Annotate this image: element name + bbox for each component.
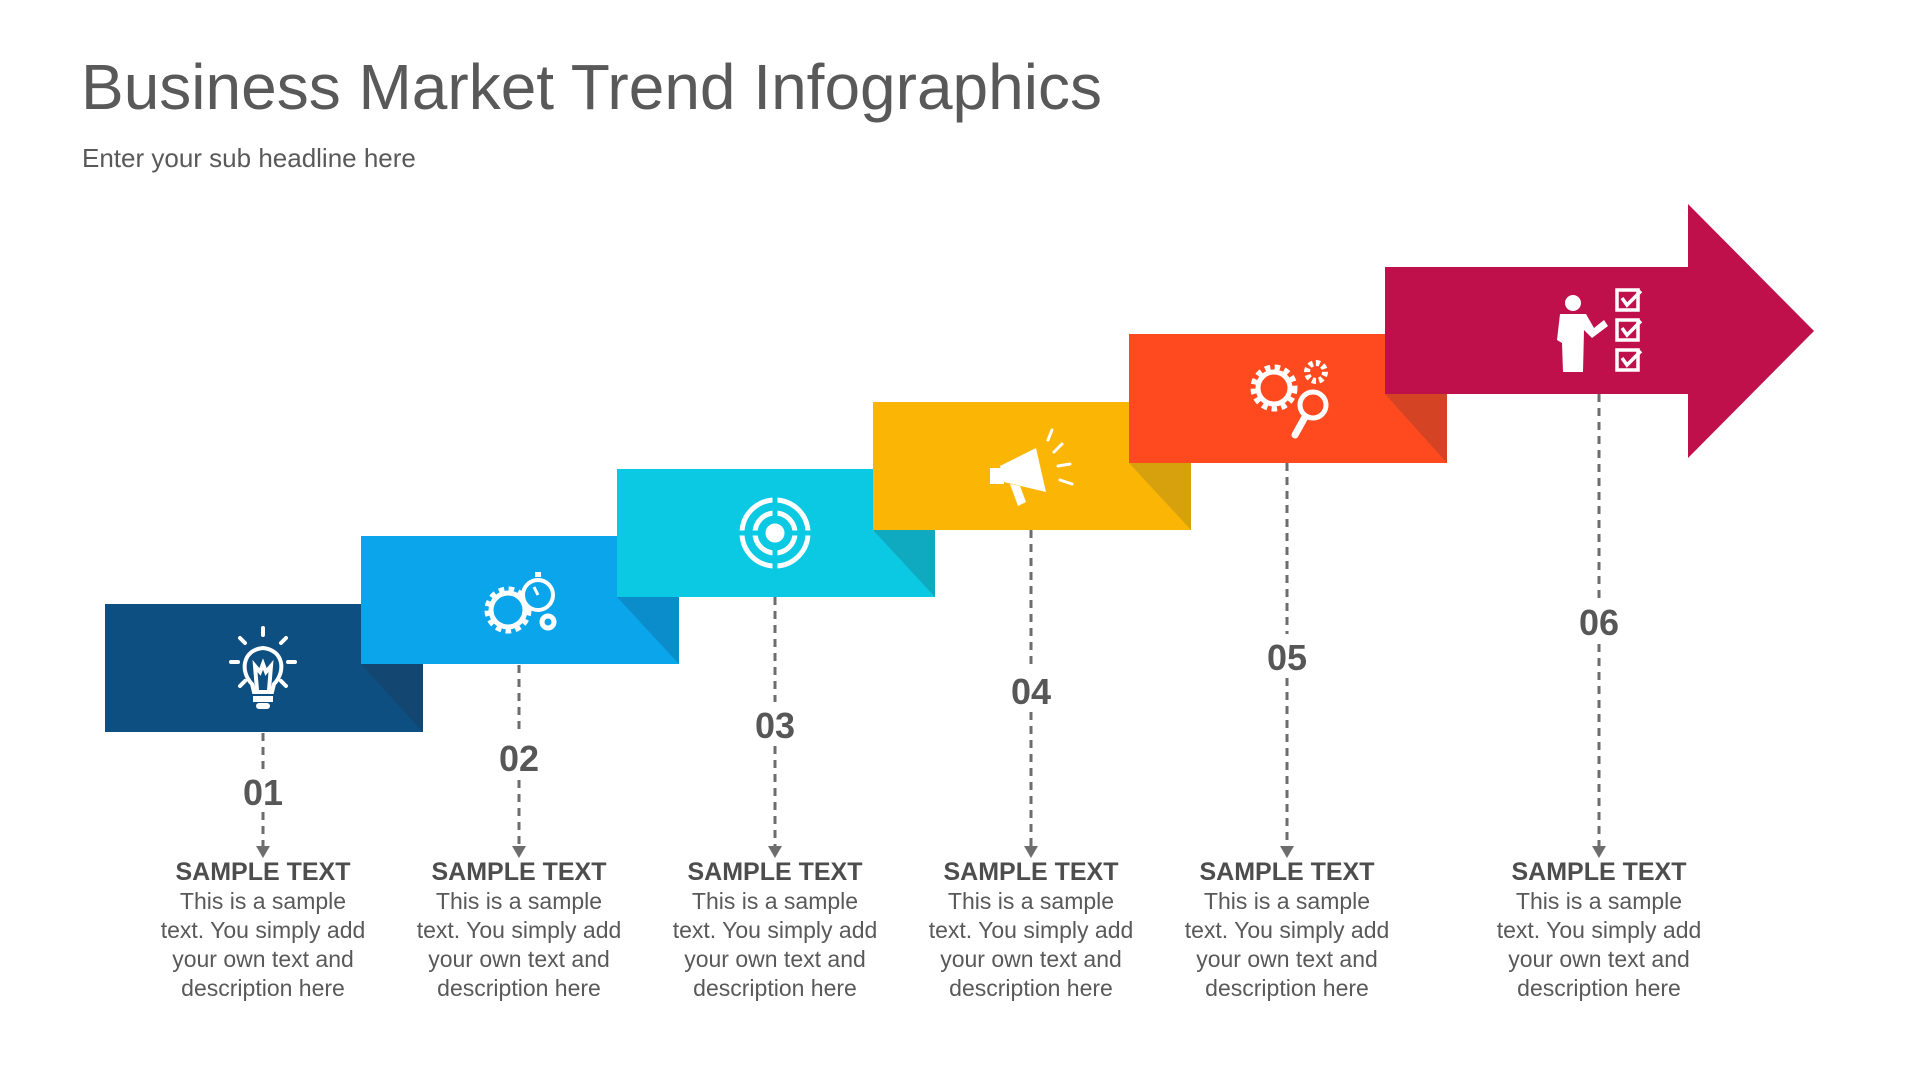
step 2 box xyxy=(361,536,679,664)
text: 04 xyxy=(1011,671,1051,712)
caption 2: SAMPLE TEXT xyxy=(431,858,606,886)
icon: presenter with checklist xyxy=(1557,290,1641,372)
caption 4: This is a sample xyxy=(948,888,1114,914)
caption 3: text. You simply add xyxy=(673,917,877,943)
text: 01 xyxy=(243,772,283,813)
icon: megaphone xyxy=(990,430,1072,506)
dashed connectors xyxy=(256,394,1606,858)
text: 06 xyxy=(1579,602,1619,643)
caption 5: SAMPLE TEXT xyxy=(1199,858,1374,886)
numbers xyxy=(243,602,1619,813)
caption 1: This is a sample xyxy=(180,888,346,914)
caption 6 xyxy=(1497,858,1701,1001)
caption 1 xyxy=(161,858,365,1001)
icon: gears with magnifier xyxy=(1255,363,1326,435)
caption 3 xyxy=(673,858,877,1001)
caption 6: your own text and xyxy=(1508,946,1690,972)
step 3 box xyxy=(617,469,935,597)
caption 1: your own text and xyxy=(172,946,354,972)
caption 3: This is a sample xyxy=(692,888,858,914)
caption 4 xyxy=(929,858,1133,1001)
step 5 box xyxy=(1129,334,1447,463)
subtitle: Enter your sub headline here xyxy=(82,143,416,173)
caption 4: your own text and xyxy=(940,946,1122,972)
caption 4: SAMPLE TEXT xyxy=(943,858,1118,886)
caption 6: description here xyxy=(1517,975,1681,1001)
text: 02 xyxy=(499,738,539,779)
caption 1: description here xyxy=(181,975,345,1001)
caption 5: your own text and xyxy=(1196,946,1378,972)
caption 3: your own text and xyxy=(684,946,866,972)
caption 5: This is a sample xyxy=(1204,888,1370,914)
caption 4: text. You simply add xyxy=(929,917,1133,943)
caption 5 xyxy=(1185,858,1389,1001)
caption 2 xyxy=(417,858,621,1001)
caption 5: text. You simply add xyxy=(1185,917,1389,943)
caption 1: text. You simply add xyxy=(161,917,365,943)
caption 1: SAMPLE TEXT xyxy=(175,858,350,886)
caption 3: description here xyxy=(693,975,857,1001)
text: 05 xyxy=(1267,637,1307,678)
icon: target xyxy=(739,497,811,570)
title: Business Market Trend Infographics xyxy=(81,51,1102,123)
caption 4: description here xyxy=(949,975,1113,1001)
icon: light bulb xyxy=(231,628,295,709)
step 4 box xyxy=(873,402,1191,530)
caption 6: SAMPLE TEXT xyxy=(1511,858,1686,886)
caption 2: This is a sample xyxy=(436,888,602,914)
caption 2: your own text and xyxy=(428,946,610,972)
caption 2: text. You simply add xyxy=(417,917,621,943)
step 1 box xyxy=(105,604,423,732)
step 6 arrow xyxy=(1385,204,1814,458)
caption 6: text. You simply add xyxy=(1497,917,1701,943)
caption 5: description here xyxy=(1205,975,1369,1001)
caption 6: This is a sample xyxy=(1516,888,1682,914)
icon: gears with stopwatch xyxy=(489,572,554,629)
text: 03 xyxy=(755,705,795,746)
caption 2: description here xyxy=(437,975,601,1001)
caption 3: SAMPLE TEXT xyxy=(687,858,862,886)
